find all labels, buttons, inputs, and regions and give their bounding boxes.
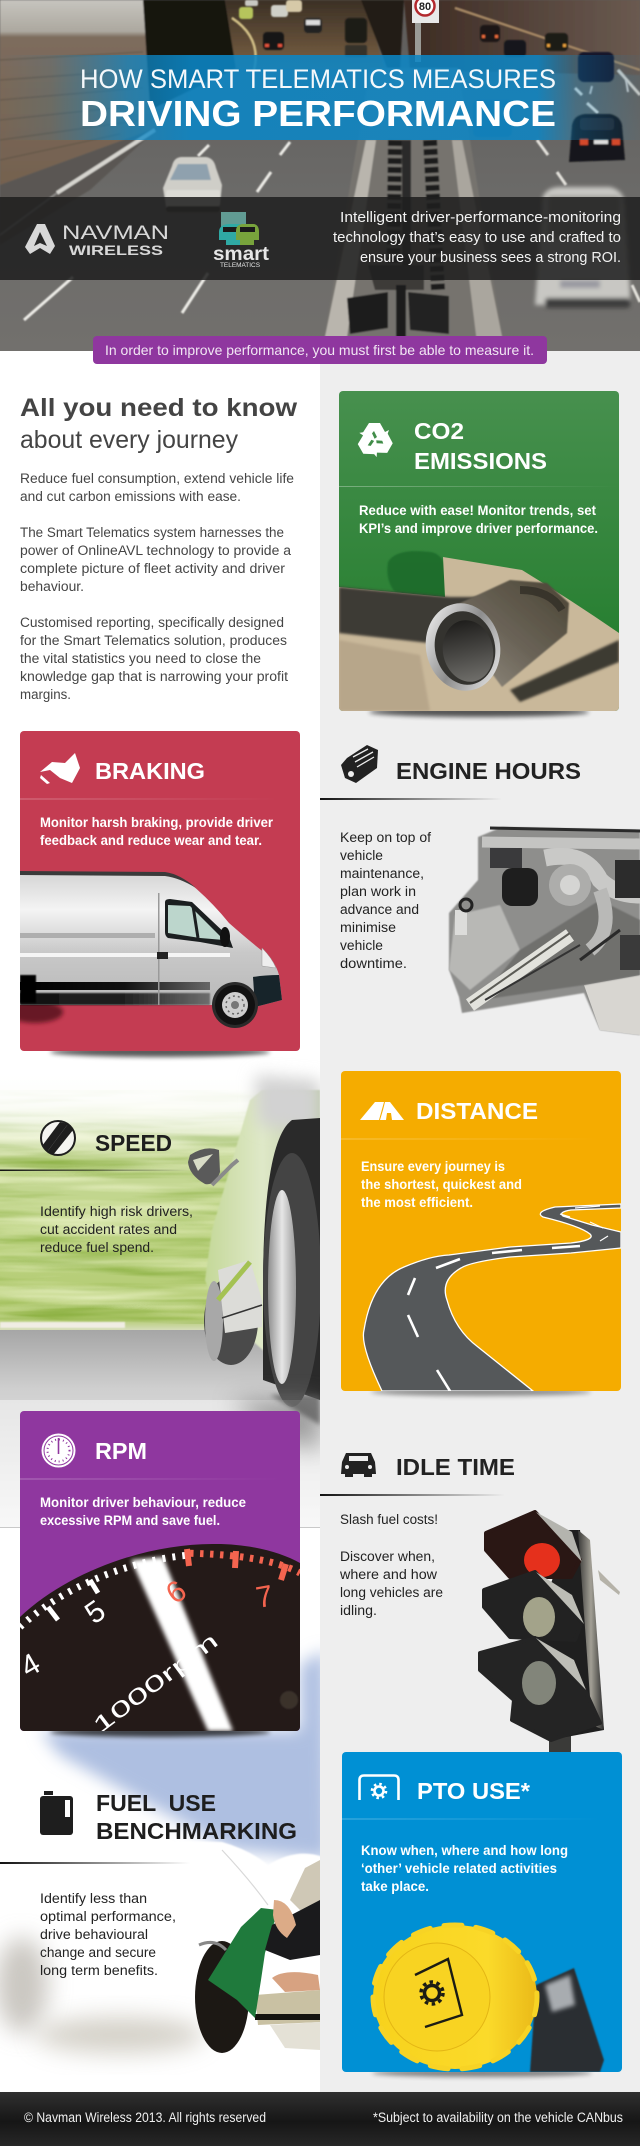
co2 text xyxy=(359,503,598,536)
distance text: the most efficient. xyxy=(361,1195,473,1210)
engine text: vehicle xyxy=(340,848,383,863)
speed text: Identify high risk drivers, xyxy=(40,1204,193,1219)
paragraph 2: complete picture of fleet activity and driver xyxy=(20,561,286,576)
engine text: minimise xyxy=(340,920,396,935)
heading: fuel use benchmarking: BENCHMARKING xyxy=(96,1818,297,1844)
pto text xyxy=(361,1843,568,1894)
co2 text: KPI’s and improve driver performance. xyxy=(359,521,598,536)
icon: gauge xyxy=(42,1434,76,1468)
intro text: Intelligent driver-performance-monitoring xyxy=(340,209,621,226)
icon: fuel can xyxy=(40,1791,73,1835)
title line 2: DRIVING PERFORMANCE xyxy=(80,93,556,134)
icon: car xyxy=(341,1453,376,1477)
navman wireless logo: NAVMAN xyxy=(62,222,169,244)
page background: right grey column xyxy=(320,351,640,2092)
rpm text xyxy=(40,1495,246,1528)
paragraph 2: power of OnlineAVL technology to provide a xyxy=(20,543,291,558)
idle text: idling. xyxy=(340,1603,377,1618)
idle text: Slash fuel costs! xyxy=(340,1512,438,1527)
traffic cars xyxy=(163,0,628,212)
paragraph 1: Reduce fuel consumption, extend vehicle life xyxy=(20,471,294,486)
fuel text: Identify less than xyxy=(40,1891,147,1906)
navman wireless logo: WIRELESS xyxy=(69,242,163,258)
smart telematics logo xyxy=(213,212,270,269)
engine image xyxy=(449,827,640,1035)
smart telematics logo: TELEMATICS xyxy=(220,263,260,269)
van image xyxy=(7,871,282,1028)
speed limit sign xyxy=(412,0,439,62)
panel: engine hours xyxy=(320,745,640,1035)
paragraph 3: for the Smart Telematics solution, produces xyxy=(20,633,287,648)
engine text: advance and xyxy=(340,902,419,917)
panel: rpm xyxy=(15,1411,300,1738)
paragraph 2: behaviour. xyxy=(20,579,84,594)
subheading: about every journey xyxy=(20,426,238,454)
idle text xyxy=(339,1512,443,1618)
copyright: © Navman Wireless 2013. All rights reserved xyxy=(24,2110,266,2125)
heading: all you need to know: All you need to know xyxy=(20,394,298,422)
rev counter photo xyxy=(15,1544,300,1738)
distance text xyxy=(361,1159,522,1210)
rev counter photo: 7 xyxy=(253,1579,276,1615)
distance text: the shortest, quickest and xyxy=(361,1177,522,1192)
intro text: ensure your business sees a strong ROI. xyxy=(360,249,621,266)
paragraph 2: The Smart Telematics system harnesses the xyxy=(20,525,284,540)
pto text: Know when, where and how long xyxy=(361,1843,568,1858)
pto text: take place. xyxy=(361,1879,429,1894)
speed text: reduce fuel spend. xyxy=(40,1240,154,1255)
heading: distance: DISTANCE xyxy=(416,1098,538,1124)
pto text: ‘other’ vehicle related activities xyxy=(361,1861,557,1876)
engine text xyxy=(340,830,431,971)
panel: distance xyxy=(341,1071,621,1396)
heading: speed: SPEED xyxy=(95,1130,172,1156)
engine text: plan work in xyxy=(340,884,416,899)
traffic light xyxy=(480,1512,620,1754)
engine text: vehicle xyxy=(340,938,383,953)
fuel text: optimal performance, xyxy=(40,1909,176,1924)
road illustration xyxy=(363,1204,621,1391)
paragraph 3: the vital statistics you need to close the xyxy=(20,651,261,666)
footer xyxy=(0,2092,640,2146)
paragraph 1 xyxy=(20,471,294,504)
car xyxy=(188,1075,321,1407)
paragraph 3: Customised reporting, specifically designed xyxy=(20,615,284,630)
title line 1: HOW SMART TELEMATICS MEASURES xyxy=(80,64,556,94)
heading: co2 emissions xyxy=(414,418,547,474)
heading: braking: BRAKING xyxy=(95,758,205,784)
fuel background photo xyxy=(0,1650,330,2092)
navman wireless logo xyxy=(25,222,169,258)
heading: co2 emissions: EMISSIONS xyxy=(414,448,547,474)
panel: idle time xyxy=(320,1453,620,1754)
purple banner: In order to improve performance, you must first be able to measure it. xyxy=(105,342,534,358)
icon: road xyxy=(360,1102,404,1120)
braking text xyxy=(40,815,274,848)
icon: engine xyxy=(341,745,378,783)
icon: pto gear box xyxy=(360,1776,398,1800)
icon: navman mark xyxy=(25,224,55,254)
speed background photo xyxy=(0,1070,321,1528)
co2 text: Reduce with ease! Monitor trends, set xyxy=(359,503,596,518)
icon: brake pedal xyxy=(40,753,80,784)
engine text: maintenance, xyxy=(340,866,424,881)
braking text: feedback and reduce wear and tear. xyxy=(40,833,262,848)
panel: braking xyxy=(7,731,300,1057)
title band xyxy=(0,55,640,140)
fuel text: change and secure xyxy=(40,1945,156,1960)
purple banner xyxy=(93,336,547,364)
intro text: technology that’s easy to use and crafted to xyxy=(333,229,621,246)
heading: fuel use benchmarking xyxy=(96,1790,297,1844)
yellow cap photo xyxy=(373,1925,604,2072)
rev counter photo: 1000rpm xyxy=(88,1628,223,1738)
fuel text xyxy=(40,1891,176,1978)
rev counter photo: 6 xyxy=(160,1574,193,1611)
panel: co2 emissions xyxy=(339,391,619,717)
speed text xyxy=(40,1204,193,1255)
fuel text: long term benefits. xyxy=(40,1963,158,1978)
panel: speed xyxy=(0,1070,321,1528)
icon: trucks xyxy=(219,212,259,245)
heading: rpm: RPM xyxy=(95,1438,147,1464)
exhaust photo xyxy=(339,551,619,711)
paragraph 3: margins. xyxy=(20,687,71,702)
icon: recycle xyxy=(353,423,396,461)
heading: pto use: PTO USE* xyxy=(417,1778,531,1804)
distance text: Ensure every journey is xyxy=(361,1159,505,1174)
panel: pto use xyxy=(342,1752,622,2077)
dark logo band xyxy=(0,197,640,280)
hero photo of motorway xyxy=(0,0,640,351)
engine text: Keep on top of xyxy=(340,830,431,845)
panel: fuel use benchmarking xyxy=(0,1790,320,2053)
paragraph 3: knowledge gap that is narrowing your profit xyxy=(20,669,288,684)
intro text block xyxy=(20,394,298,702)
braking text: Monitor harsh braking, provide driver xyxy=(40,815,274,830)
paragraph 2 xyxy=(20,525,291,594)
paragraph 3 xyxy=(20,615,288,702)
intro text xyxy=(333,209,621,266)
heading: engine hours: ENGINE HOURS xyxy=(396,758,581,784)
heading: co2 emissions: CO2 xyxy=(414,418,464,444)
smart telematics logo: smart xyxy=(213,244,270,265)
rpm text: Monitor driver behaviour, reduce xyxy=(40,1495,246,1510)
idle text: Discover when, xyxy=(340,1549,435,1564)
idle text: where and how xyxy=(339,1567,437,1582)
speed text: cut accident rates and xyxy=(40,1222,177,1237)
rev counter photo: 5 xyxy=(79,1594,112,1631)
speed limit sign: 80 xyxy=(419,1,431,13)
footnote: *Subject to availability on the vehicle CANbus xyxy=(373,2110,623,2125)
heading: idle time: IDLE TIME xyxy=(396,1454,515,1480)
heading: fuel use benchmarking: FUEL USE xyxy=(96,1790,216,1816)
paragraph 1: and cut carbon emissions with ease. xyxy=(20,489,241,504)
fuel nozzle photo xyxy=(195,1850,320,2053)
icon: end of speed limit xyxy=(41,1121,75,1155)
rpm text: excessive RPM and save fuel. xyxy=(40,1513,220,1528)
rev counter photo: 4 xyxy=(15,1647,46,1684)
engine text: downtime. xyxy=(340,956,407,971)
fuel text: drive behavioural xyxy=(40,1927,148,1942)
idle text: long vehicles are xyxy=(340,1585,443,1600)
